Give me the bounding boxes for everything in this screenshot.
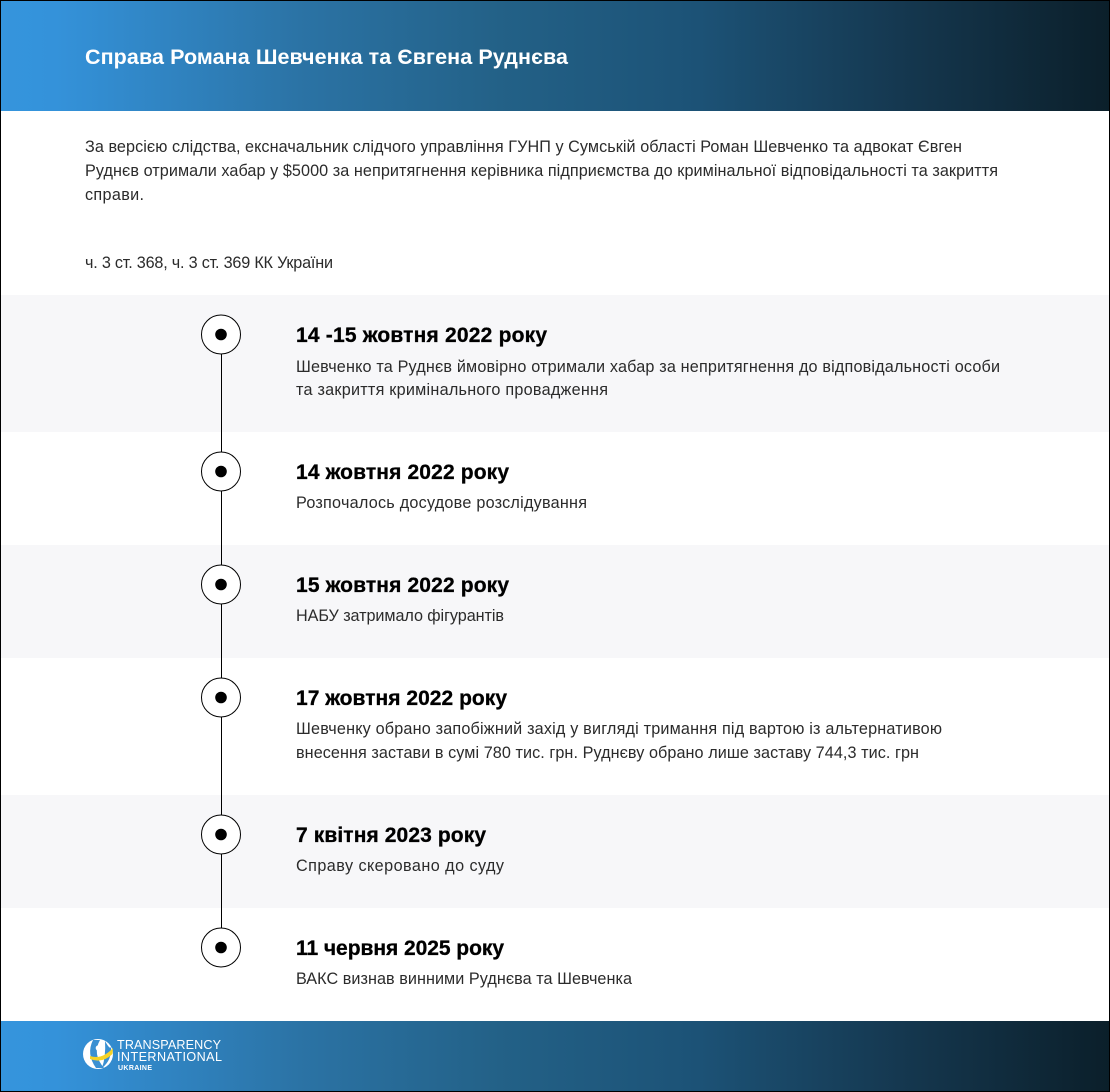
description 2: Розпочалось досудове розслідування bbox=[296, 494, 587, 512]
logo: Transparency International Ukraine bbox=[83, 1038, 222, 1072]
legal articles: ч. 3 ст. 368, ч. 3 ст. 369 КК України bbox=[85, 254, 333, 272]
description 4: Шевченку обрано запобіжний захід у вигляді тримання під вартою із альтернативою bbox=[296, 720, 942, 738]
description 1 bbox=[296, 358, 1000, 399]
intro text bbox=[85, 138, 998, 204]
band: row 3 background bbox=[0, 545, 1110, 658]
timeline event 3 bbox=[202, 565, 509, 625]
logo emblem bbox=[83, 1039, 113, 1069]
date 2: 14 жовтня 2022 року bbox=[296, 461, 509, 484]
date 6: 11 червня 2025 року bbox=[296, 937, 504, 960]
band: row 5 background bbox=[0, 795, 1110, 908]
logo wordmark: UKRAINE bbox=[118, 1065, 152, 1072]
description 5: Справу скеровано до суду bbox=[296, 857, 505, 875]
timeline connector line bbox=[220, 334, 222, 947]
logo wordmark: INTERNATIONAL bbox=[117, 1050, 222, 1064]
date 3: 15 жовтня 2022 року bbox=[296, 574, 509, 597]
intro text: За версією слідства, екс­начальник слідчого управління ГУНП у Сумській області Роман Шевченко та адвокат Євген bbox=[85, 138, 962, 156]
marker 1 bbox=[202, 315, 240, 354]
date 5: 7 квітня 2023 року bbox=[296, 824, 486, 847]
timeline event 4 bbox=[202, 678, 942, 762]
marker 2 bbox=[202, 452, 240, 491]
description 1: та закриття кримінального провадження bbox=[296, 381, 608, 399]
description 6: ВАКС визнав винними Руднєва та Шевченка bbox=[296, 970, 632, 988]
description 4 bbox=[296, 720, 942, 762]
timeline event 2 bbox=[202, 452, 587, 512]
marker 5 bbox=[202, 815, 240, 854]
timeline event 5 bbox=[202, 815, 505, 875]
logo wordmark: TRANSPARENCY bbox=[117, 1038, 222, 1052]
date 4: 17 жовтня 2022 року bbox=[296, 687, 507, 710]
timeline event 6 bbox=[202, 928, 632, 988]
marker 4 bbox=[202, 678, 240, 717]
marker 6 bbox=[202, 928, 240, 967]
intro text: Руднєв отримали хабар у $5000 за непритягнення керівника підприємства до кримінальної відповідальності та закриття bbox=[85, 162, 998, 180]
description 4: внесення застави в сумі 780 тис. грн. Руднєву обрано лише заставу 744,3 тис. грн bbox=[296, 744, 919, 762]
footer banner bbox=[0, 1021, 1110, 1091]
description 1: Шевченко та Руднєв ймовірно отримали хабар за непритягнення до відповідальності особи bbox=[296, 358, 1000, 376]
date 1: 14 -15 жовтня 2022 року bbox=[296, 324, 547, 347]
description 3: НАБУ затримало фігурантів bbox=[296, 607, 504, 625]
header banner bbox=[0, 0, 1110, 111]
logo wordmark bbox=[117, 1038, 222, 1072]
timeline event 1 bbox=[202, 315, 1000, 399]
marker 3 bbox=[202, 565, 240, 604]
band: row 1 background bbox=[0, 295, 1110, 432]
title: Справа Романа Шевченка та Євгена Руднєва bbox=[85, 45, 569, 69]
intro text: справи. bbox=[85, 186, 144, 204]
